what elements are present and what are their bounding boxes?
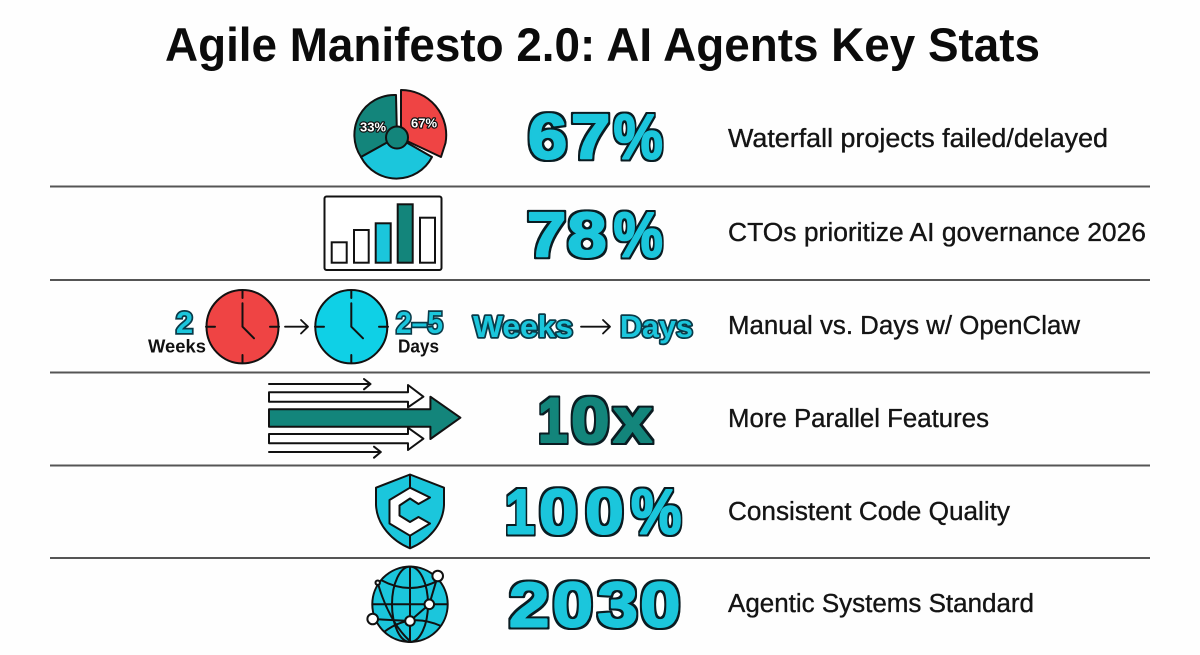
stat: weeks to days: Days [620, 309, 693, 344]
stat: 67% [528, 101, 663, 173]
stat: 2030: 2030 [509, 571, 680, 640]
icon: pie chart: 67% [411, 116, 437, 130]
stat: weeks to days: Weeks [473, 309, 573, 344]
label: CTOs: CTOs prioritize AI governance 2026 [728, 219, 1146, 247]
label: waterfall: Waterfall projects failed/delayed [728, 125, 1108, 153]
stat: 100% [505, 477, 681, 548]
stat: 67%: % [614, 101, 663, 172]
icon: pie chart [354, 90, 446, 179]
icon: clocks comparison: Weeks [148, 336, 206, 356]
icon: clocks comparison: 2–5 [396, 305, 443, 340]
icon: clocks comparison: 2 [176, 305, 193, 340]
icon: shield [376, 474, 444, 548]
stat: 100%: 00 [539, 477, 624, 548]
label: parallel features: More Parallel Features [728, 405, 989, 433]
icon: parallel arrows [269, 379, 460, 458]
stat: weeks to days [473, 309, 693, 344]
icon: clocks comparison: Days [398, 336, 439, 356]
stat: 100%: 1 [505, 477, 535, 548]
stat: 100%: % [631, 477, 681, 547]
stat: 10x: 1 [538, 386, 568, 456]
stat: 78%: % [614, 199, 663, 270]
stat: 78%: 78 [527, 200, 607, 271]
stat: 78% [527, 199, 663, 271]
icon: globe network [367, 567, 448, 642]
stat: 67%: 67 [528, 102, 610, 173]
icon: pie chart: 33% [360, 120, 386, 134]
title: Agile Manifesto 2.0: AI Agents Key Stats [165, 18, 1040, 71]
icon: clocks comparison [148, 290, 443, 363]
stat: 10x: 0x [571, 386, 652, 456]
label: manual vs days: Manual vs. Days w/ OpenClaw [728, 312, 1081, 340]
icon: bar chart [324, 196, 442, 270]
label: agentic systems: Agentic Systems Standard [728, 590, 1034, 618]
label: code quality: Consistent Code Quality [728, 498, 1010, 526]
